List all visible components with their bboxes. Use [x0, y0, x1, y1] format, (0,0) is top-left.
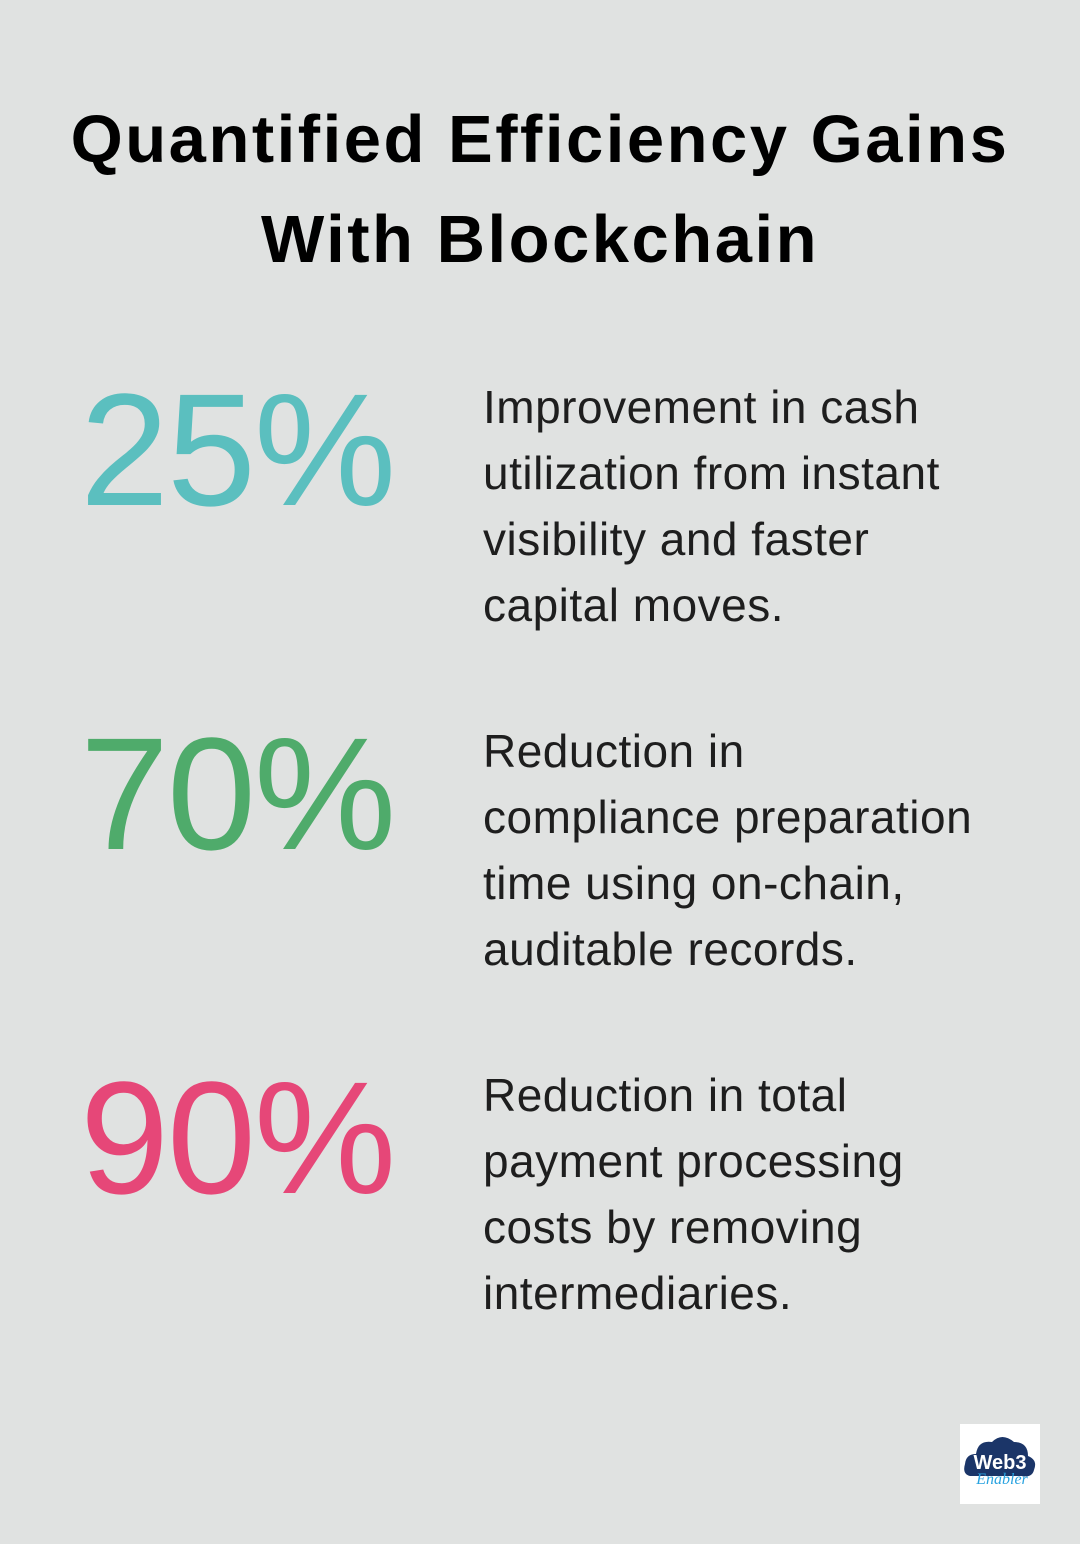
stat: 90%: 90% [80, 1048, 394, 1227]
text: 70% description: Reduction in [483, 725, 745, 777]
text: 90% description: intermediaries. [483, 1267, 792, 1319]
logo: Web3 Enabler [960, 1424, 1040, 1504]
text: 25% description: visibility and faster [483, 513, 869, 565]
text: 25% description [483, 381, 940, 631]
logo: Web3 Enabler: Web3 [974, 1452, 1026, 1474]
title: Quantified Efficiency Gains [71, 102, 1009, 177]
stat: 25%: 25% [80, 360, 394, 539]
text: 90% description: Reduction in total [483, 1069, 847, 1121]
logo: Web3 Enabler: Enabler [975, 1471, 1029, 1488]
text: 90% description: payment processing [483, 1135, 904, 1187]
text: 90% description: costs by removing [483, 1201, 862, 1253]
text: 25% description: capital moves. [483, 579, 784, 631]
text: 25% description: Improvement in cash [483, 381, 919, 433]
text: 90% description [483, 1069, 904, 1319]
stat: 70%: 70% [80, 704, 394, 883]
text: 70% description [483, 725, 972, 975]
title: With Blockchain [261, 202, 819, 277]
text: 25% description: utilization from instant [483, 447, 940, 499]
text: 70% description: time using on-chain, [483, 857, 905, 909]
title [71, 102, 1009, 277]
text: 70% description: auditable records. [483, 923, 858, 975]
text: 70% description: compliance preparation [483, 791, 972, 843]
